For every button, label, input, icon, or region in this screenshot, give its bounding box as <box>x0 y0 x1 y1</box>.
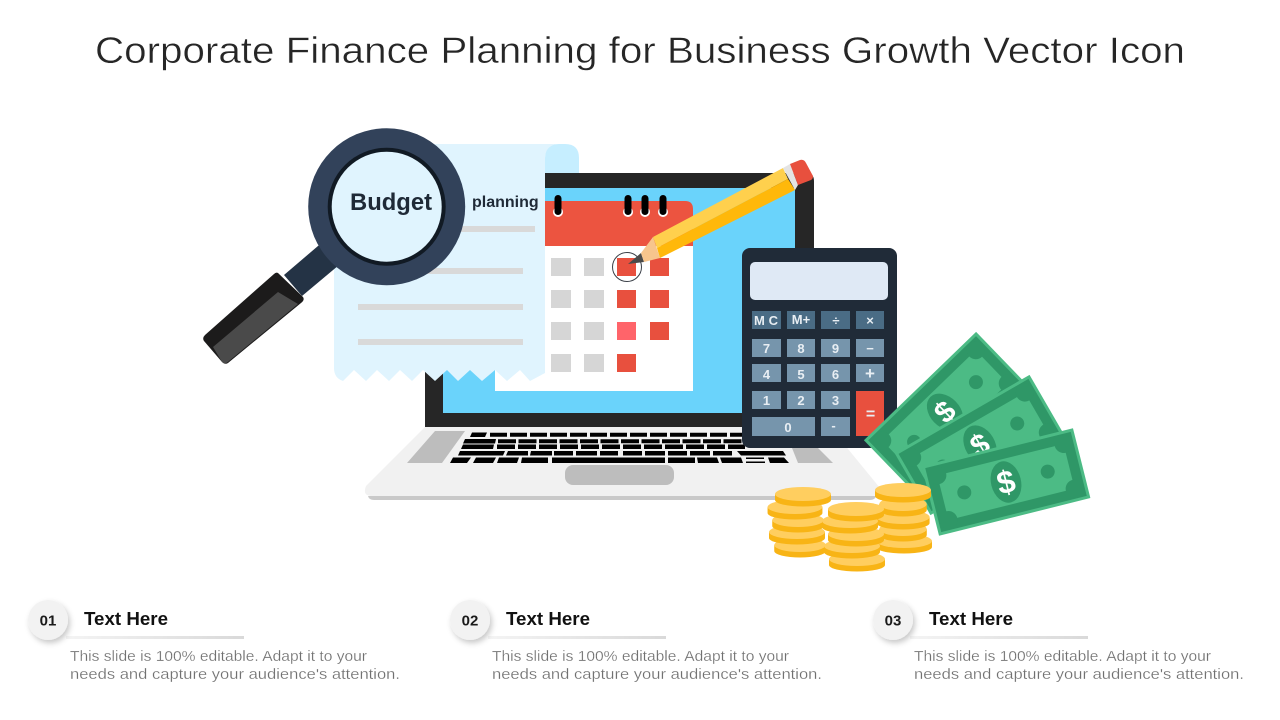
pencil wood <box>641 237 660 262</box>
bill 3 <box>922 428 1090 536</box>
handle neck <box>284 240 345 296</box>
receipt <box>334 144 579 381</box>
handle grip <box>203 273 304 364</box>
lens glass <box>332 152 442 262</box>
underline <box>66 636 244 639</box>
description <box>70 648 400 683</box>
pencil body dark <box>657 179 795 258</box>
lens ring <box>308 128 465 285</box>
left speaker <box>407 431 465 463</box>
description <box>914 648 1244 683</box>
calendar grey days <box>551 258 604 372</box>
key labels: 6 <box>832 367 839 382</box>
item 03 <box>873 600 1244 683</box>
function keys <box>752 311 884 329</box>
number: 03 <box>885 612 901 630</box>
underline <box>910 636 1088 639</box>
keyboard <box>450 432 789 463</box>
pencil <box>628 160 813 264</box>
key labels: = <box>866 406 875 423</box>
bill 2: $ <box>965 427 996 464</box>
key labels: × <box>866 313 874 328</box>
underline <box>488 636 666 639</box>
key labels: 3 <box>832 393 839 408</box>
description: This slide is 100% editable. Adapt it to your <box>492 648 789 665</box>
key labels: 1 <box>763 393 770 408</box>
planning label: planning <box>472 194 539 211</box>
bill 1: $ <box>928 394 963 430</box>
heading: Text Here <box>84 609 168 629</box>
calendar red days <box>617 258 669 372</box>
heading: Text Here <box>506 609 590 629</box>
number: 01 <box>40 612 56 630</box>
description: needs and capture your audience's attention. <box>914 666 1244 683</box>
key labels: MC <box>754 313 779 328</box>
description: This slide is 100% editable. Adapt it to your <box>914 648 1211 665</box>
right speaker <box>792 448 833 463</box>
title: Corporate Finance Planning for Business Growth Vector Icon <box>95 29 1185 71</box>
bill 2 <box>894 375 1066 515</box>
key labels: 8 <box>797 341 805 356</box>
receipt scroll tab <box>545 144 579 173</box>
magnifying glass <box>203 128 465 364</box>
right stack <box>875 483 932 554</box>
number: 02 <box>462 612 478 630</box>
number badge <box>873 600 913 640</box>
description <box>492 648 822 683</box>
calculator display <box>750 262 888 300</box>
touchpad <box>565 465 674 485</box>
description: needs and capture your audience's attention. <box>70 666 400 683</box>
item 01 <box>28 600 400 683</box>
laptop screen bezel <box>425 173 814 427</box>
laptop base edge <box>368 496 876 500</box>
equals key <box>856 391 884 436</box>
calendar page <box>495 240 693 391</box>
number badge <box>450 600 490 640</box>
laptop screen <box>443 188 795 413</box>
coin stacks <box>768 483 932 572</box>
key labels: 2 <box>797 393 805 408</box>
money bills <box>864 332 1090 536</box>
key labels: ÷ <box>832 313 840 328</box>
description: This slide is 100% editable. Adapt it to your <box>70 648 367 665</box>
key labels: − <box>866 341 874 356</box>
key labels: - <box>831 418 836 433</box>
receipt paper <box>334 144 556 381</box>
key labels: 5 <box>797 367 805 382</box>
handle highlight <box>213 292 298 363</box>
left stack <box>768 487 831 558</box>
receipt lines <box>358 226 535 345</box>
key labels <box>754 312 875 435</box>
calendar header <box>495 201 693 246</box>
pencil tip <box>628 253 644 264</box>
key labels: 4 <box>763 367 771 382</box>
item 02 <box>450 600 822 683</box>
heading: Text Here <box>929 609 1013 629</box>
number keys <box>752 339 884 436</box>
key labels: + <box>865 364 875 383</box>
key labels: 9 <box>832 341 839 356</box>
pencil eraser <box>790 160 813 185</box>
bill 1 <box>864 332 1026 492</box>
description: needs and capture your audience's attention. <box>492 666 822 683</box>
laptop base <box>365 427 880 496</box>
circled date <box>612 252 642 282</box>
key labels: M+ <box>792 312 811 327</box>
lens rim <box>328 148 446 266</box>
laptop <box>365 173 880 500</box>
calculator <box>742 248 897 448</box>
Budget label: Budget <box>350 189 432 216</box>
calendar <box>495 195 693 391</box>
key labels: 0 <box>784 420 792 435</box>
calendar binding rings <box>553 195 668 217</box>
number badge <box>28 600 68 640</box>
bill 3: $ <box>993 462 1019 502</box>
calculator body <box>742 248 897 448</box>
middle stack <box>822 502 885 572</box>
key labels: 7 <box>763 341 770 356</box>
pencil ferrule <box>783 164 798 190</box>
pencil body light <box>653 168 788 248</box>
